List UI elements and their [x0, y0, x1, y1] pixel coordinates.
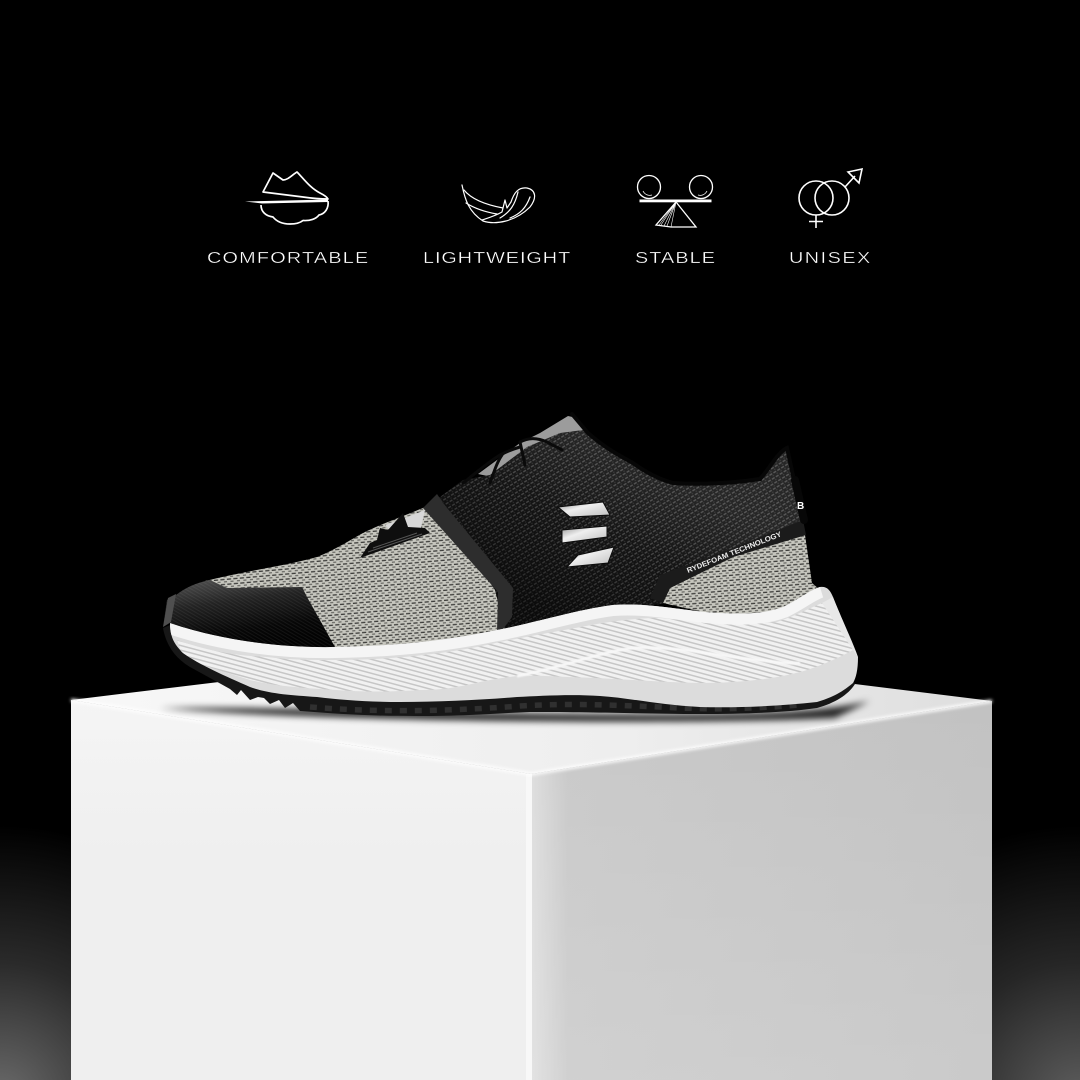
laces [463, 439, 562, 483]
rydefoam label: RYDEFOAM TECHNOLOGY [685, 529, 783, 575]
heel knit panel [663, 535, 820, 616]
collar and heel edges [572, 414, 804, 520]
shoe [163, 414, 858, 716]
midsole stripes [177, 603, 853, 692]
shoe contact shadow [160, 701, 870, 722]
logo: three metal bars [558, 502, 614, 567]
heel band [650, 520, 806, 603]
label: unisex: UNISEX [789, 249, 870, 266]
label: stable: STABLE [635, 249, 715, 266]
label: lightweight: LIGHTWEIGHT [423, 249, 570, 266]
black mesh upper [436, 430, 806, 630]
heel logo: B [797, 501, 804, 512]
eyestay [360, 510, 430, 558]
gray knit forefoot [205, 507, 516, 655]
midsole [170, 587, 858, 707]
icon row [207, 169, 870, 266]
outsole [163, 625, 855, 716]
icon: gender symbols [799, 169, 862, 228]
icon: feather [462, 185, 535, 223]
toe cap [163, 580, 335, 647]
midsole top rim [170, 587, 820, 647]
heel sidewall [822, 597, 858, 657]
plinth top surface [71, 644, 992, 774]
side band [423, 494, 513, 631]
label: comfortable: COMFORTABLE [207, 249, 368, 266]
plinth left face [71, 700, 531, 1080]
plinth right face [71, 700, 992, 1080]
icon: shoe on cloud [245, 172, 328, 224]
outsole lugs [310, 704, 800, 711]
tongue [478, 416, 585, 478]
icon: balance [638, 176, 712, 227]
white plinth [71, 644, 992, 1080]
midsole ridge [517, 648, 800, 676]
